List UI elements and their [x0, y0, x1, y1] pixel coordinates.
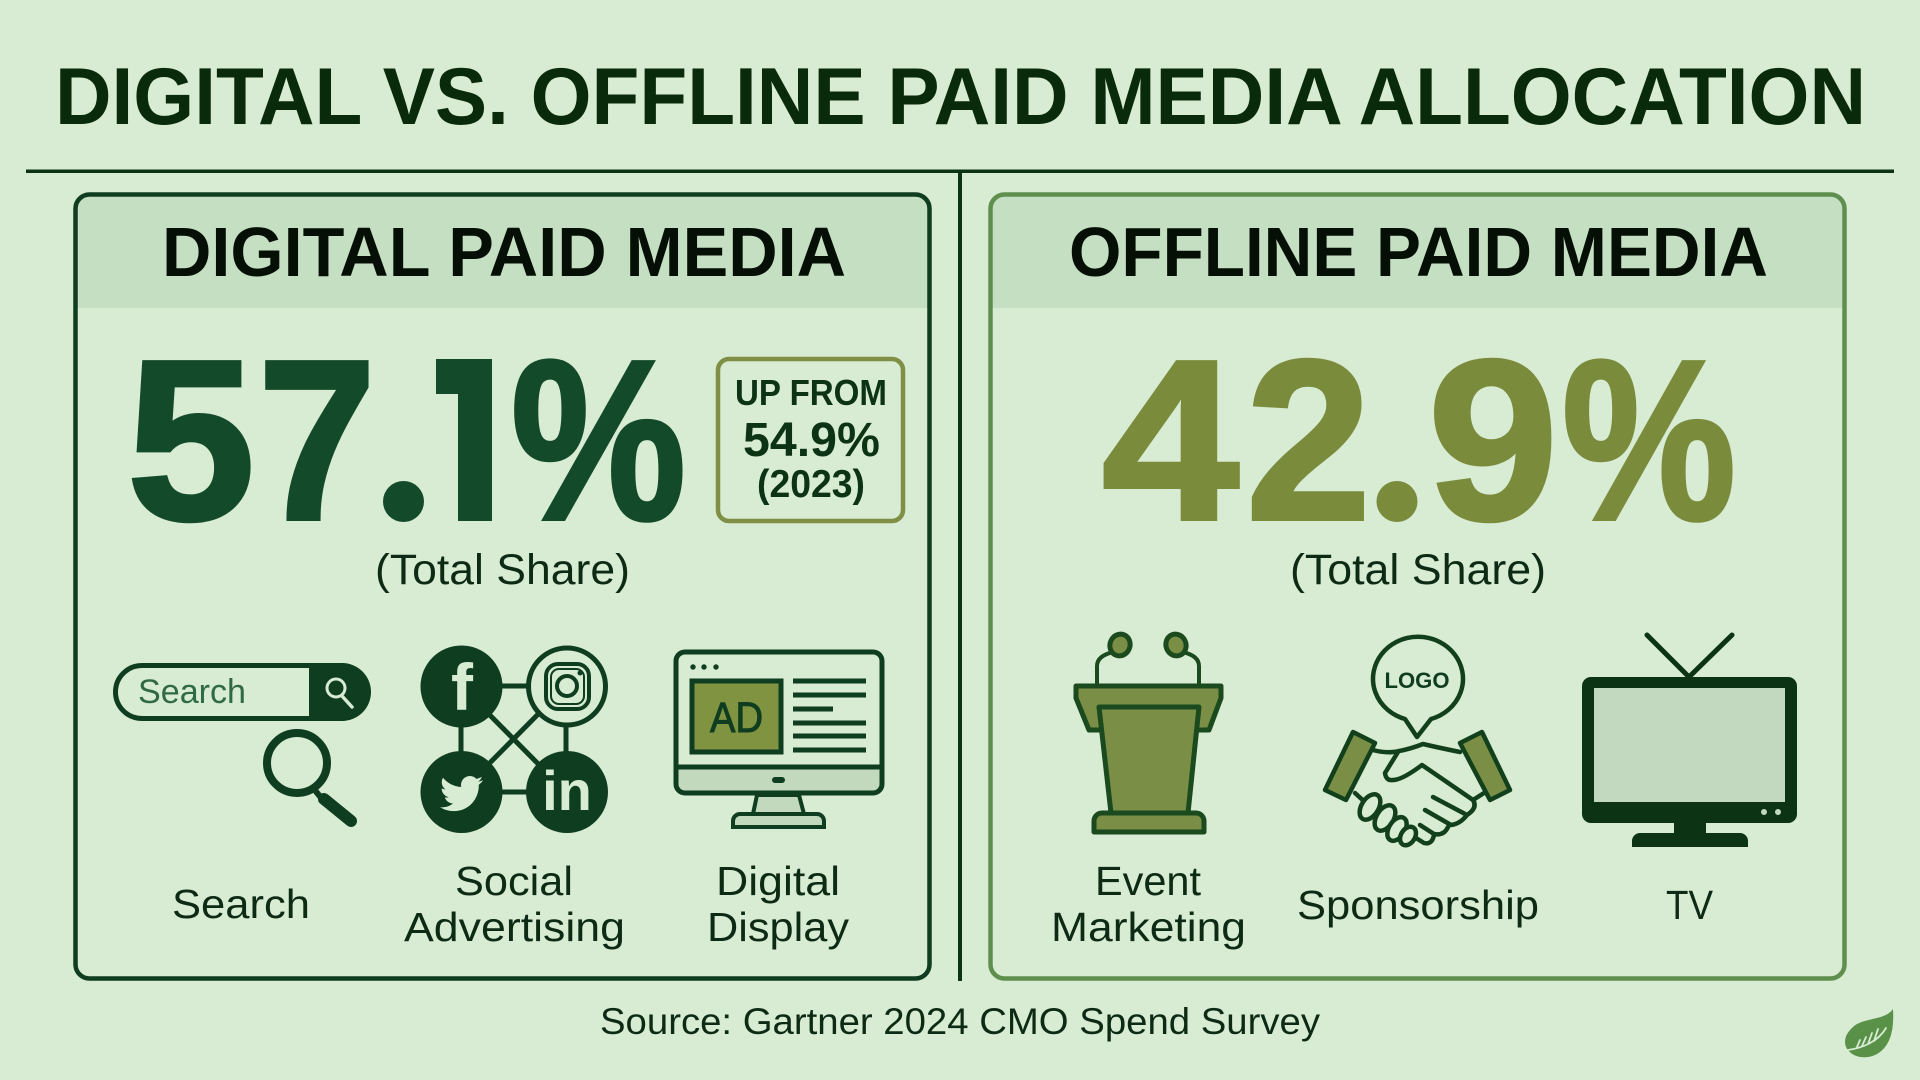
big stat: 57.1%: [127, 314, 686, 568]
label: social advertising: Social: [455, 858, 573, 904]
total share caption: offline: (Total Share): [1290, 546, 1546, 594]
callout: up from 54.9% (2023): (2023): [757, 463, 865, 506]
panel frame: offline: [990, 194, 1844, 978]
panel: offline paid media: [990, 194, 1844, 978]
big stat: 42.9%: .: [1362, 314, 1432, 568]
label: digital display: Display: [707, 904, 850, 950]
big stat: 57.1%: 1: [440, 314, 502, 568]
big stat: 57.1%: .: [368, 314, 438, 568]
icon: podium with microphones: [1076, 631, 1221, 832]
label: event marketing: [1051, 858, 1246, 950]
icon: social network: [420, 646, 608, 833]
big stat: 42.9%: [1102, 314, 1736, 568]
source note: Source: Gartner 2024 CMO Spend Survey: [600, 1001, 1321, 1042]
panel frame: digital: [76, 194, 930, 978]
panel: digital paid media: [76, 194, 930, 978]
icon: digital display monitor with ad: AD: [710, 694, 763, 742]
label: search: Search: [172, 881, 310, 927]
label: sponsorship: Sponsorship: [1297, 882, 1539, 928]
label: digital display: [707, 858, 850, 950]
big stat: 57.1%: 7: [258, 314, 376, 568]
label: digital display: Digital: [716, 858, 840, 904]
big stat: 42.9%: 4: [1102, 314, 1239, 568]
icon: social network: f: [451, 650, 474, 724]
total share caption: digital: (Total Share): [375, 546, 630, 594]
label: tv: TV: [1666, 882, 1714, 928]
label: event marketing: Event: [1095, 858, 1202, 904]
big stat: 42.9%: %: [1562, 314, 1736, 568]
callout: up from 54.9% (2023): [718, 359, 903, 521]
icon: sponsorship handshake with logo bubble: LOGO: [1384, 668, 1450, 693]
big stat: 57.1%: 5: [127, 314, 255, 568]
icon: social network: in: [542, 759, 592, 822]
callout: up from 54.9% (2023): 54.9%: [743, 414, 880, 467]
callout: up from 54.9% (2023): UP FROM: [735, 372, 887, 413]
big stat: 57.1%: %: [511, 314, 686, 568]
big stat: 42.9%: 9: [1428, 314, 1558, 568]
icon: leaf logo: [1845, 1009, 1893, 1057]
title: DIGITAL VS. OFFLINE PAID MEDIA ALLOCATION: [55, 52, 1866, 142]
label: event marketing: Marketing: [1051, 904, 1246, 950]
label: social advertising: [404, 858, 625, 950]
big stat: 42.9%: 2: [1246, 314, 1371, 568]
icon: digital display monitor with ad: [676, 652, 882, 827]
panel header band: offline: [991, 195, 1844, 308]
heading: digital paid media: DIGITAL PAID MEDIA: [162, 213, 846, 291]
icon: sponsorship handshake with logo bubble: [1325, 637, 1510, 848]
heading: offline paid media: OFFLINE PAID MEDIA: [1069, 213, 1768, 291]
icon: television: [1582, 635, 1797, 847]
label: social advertising: Advertising: [404, 904, 625, 950]
icon: search bar and magnifier: Search: [138, 673, 246, 711]
icon: search bar and magnifier: [116, 663, 371, 821]
panel header band: digital: [76, 195, 929, 308]
